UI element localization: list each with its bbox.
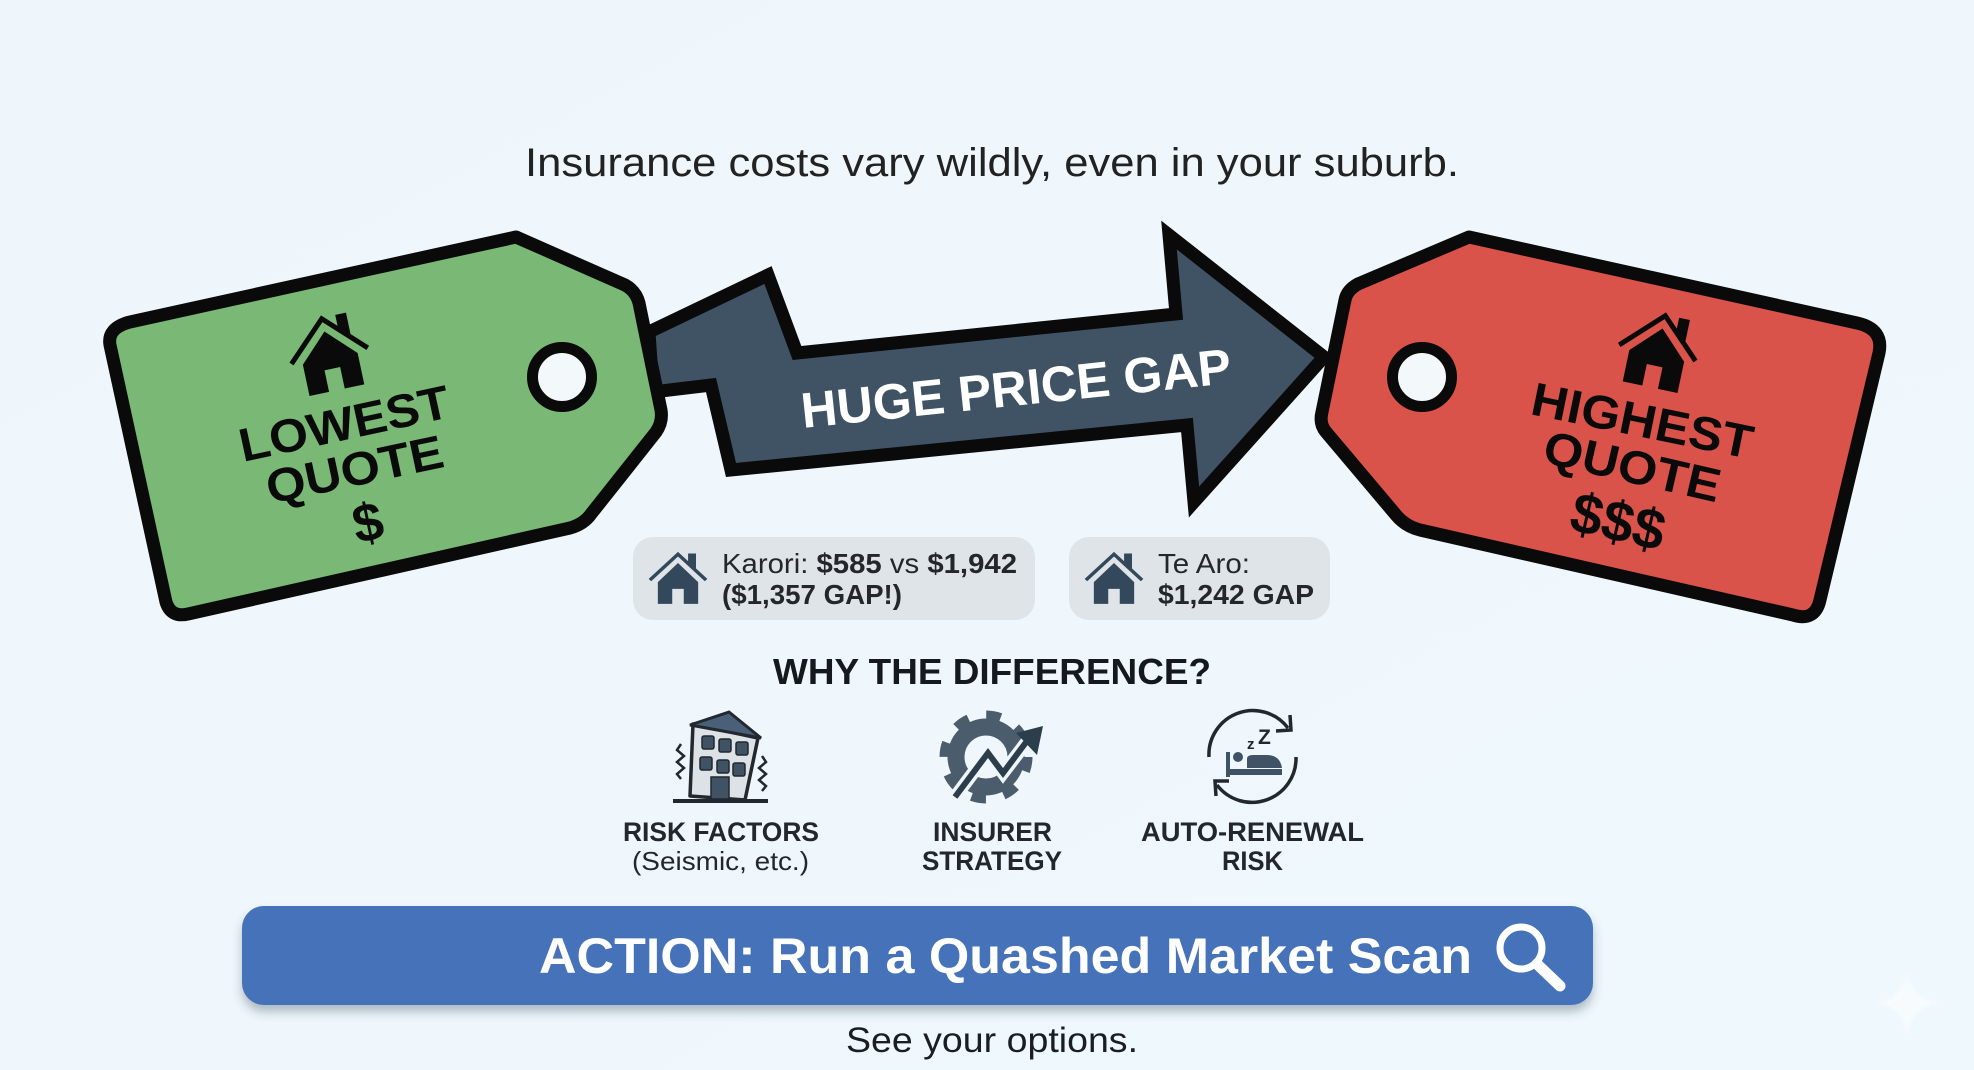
title: Insurance costs vary wildly, even in your suburb.	[525, 141, 1459, 185]
callout text line 1: Karori: $585 vs $1,942	[722, 548, 1017, 579]
icon: house	[283, 310, 375, 398]
tag text: dollar: $	[347, 491, 389, 555]
label: strategy: STRATEGY	[922, 846, 1062, 876]
tag text: dollars: $$$	[1564, 480, 1672, 564]
icon: house	[650, 554, 706, 604]
panel: highest quote tag	[1321, 237, 1880, 617]
panel: lowest quote tag	[110, 237, 661, 615]
icon: gear with rising arrow	[946, 717, 1043, 797]
label: seismic: (Seismic, etc.)	[632, 846, 809, 876]
snooze letters: Z	[1258, 726, 1271, 749]
icon: house	[1086, 554, 1142, 604]
label: risk: RISK	[1222, 846, 1283, 876]
tag hole	[532, 348, 592, 406]
panel: Te Aro callout	[1069, 537, 1330, 620]
icon: magnifier	[1500, 927, 1560, 986]
arrow label: HUGE PRICE GAP	[798, 338, 1234, 439]
snooze letters: z	[1247, 736, 1254, 753]
tag text: quote: QUOTE	[1539, 420, 1726, 512]
callout text line 2: ($1,357 GAP!)	[722, 579, 902, 610]
label: risk factors: RISK FACTORS	[623, 817, 819, 847]
icon: auto-renewal sleep	[1209, 711, 1296, 802]
banner text: ACTION: Run a Quashed Market Scan	[539, 928, 1472, 984]
panel: action banner	[242, 906, 1593, 1005]
callout text line 2: $1,242 GAP	[1158, 579, 1314, 610]
tag text: highest: HIGHEST	[1527, 372, 1758, 469]
tag hole	[1392, 348, 1452, 406]
arrow: huge price gap	[649, 235, 1324, 502]
icon: sparkle	[1873, 970, 1941, 1036]
label: auto-renewal: AUTO-RENEWAL	[1141, 817, 1364, 847]
caption: See your options.	[846, 1021, 1138, 1060]
panel: Karori callout	[633, 537, 1035, 620]
callout text line 1: Te Aro:	[1158, 548, 1250, 579]
icon: house	[1612, 307, 1704, 395]
label: insurer: INSURER	[933, 817, 1052, 847]
heading: why the difference: WHY THE DIFFERENCE?	[773, 651, 1211, 692]
tag text: quote: QUOTE	[261, 425, 448, 514]
tag text: lowest: LOWEST	[234, 375, 455, 472]
icon: earthquake building	[673, 712, 768, 801]
